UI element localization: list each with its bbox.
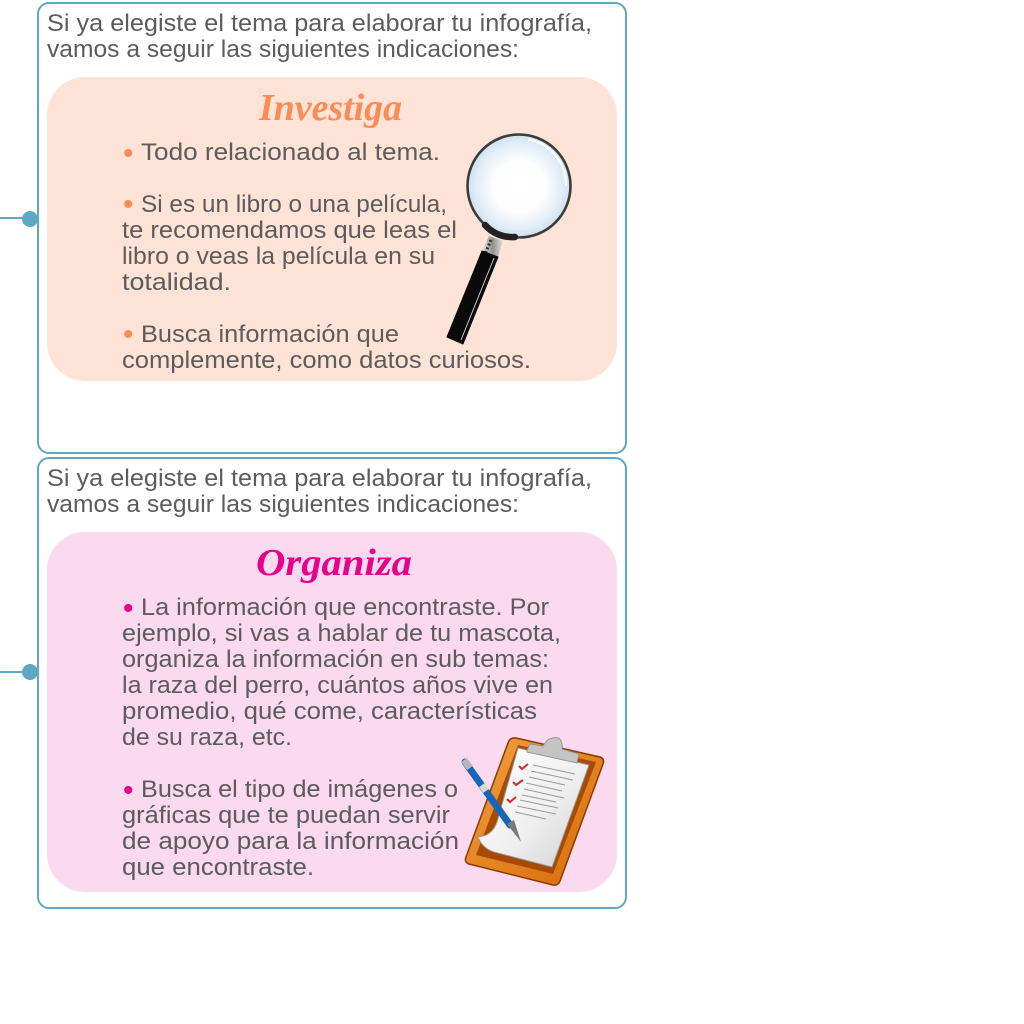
list: Investiga: libro o veas la película en su [122,243,435,270]
panel: Investiga [0,3,626,453]
intro text: vamos a seguir las siguientes indicaciones: [47,491,519,518]
list: Investiga: Todo relacionado al tema. [141,139,440,166]
list: Organiza: de su raza, etc. [122,724,292,751]
intro text: Si ya elegiste el tema para elaborar tu infografía, [47,465,592,492]
card background [47,77,617,381]
list: Organiza: • [123,592,134,625]
heading: Investiga: Investiga [258,87,402,129]
panel frame [38,458,626,908]
list: Investiga [122,137,531,374]
list: Organiza: organiza la información en sub temas: [122,646,549,673]
intro text: vamos a seguir las siguientes indicaciones: [47,36,519,63]
connector: Organiza [0,664,38,680]
list: Organiza: la raza del perro, cuántos años vive en [122,672,553,699]
card background [47,532,617,892]
list: Investiga: Busca información que [141,321,399,348]
list: Organiza: • [123,774,134,807]
icon: magnifying glass [447,134,570,344]
panel: Organiza [0,458,626,908]
list: Investiga: • [123,318,134,351]
intro text [47,10,592,63]
list: Organiza: promedio, qué come, características [122,698,537,725]
list: Organiza: que encontraste. [122,854,314,881]
connector: Investiga [0,211,38,227]
intro text: Si ya elegiste el tema para elaborar tu infografía, [47,10,592,37]
list: Organiza: Busca el tipo de imágenes o [141,776,458,803]
list: Investiga: Si es un libro o una película, [141,191,447,218]
list: Investiga: te recomendamos que leas el [122,217,457,244]
list: Investiga: • [123,188,134,221]
list: Organiza: La información que encontraste. Por [141,594,549,621]
list: Organiza: gráficas que te puedan servir [122,802,450,829]
icon: clipboard and pen [464,738,604,885]
heading: Organiza: Organiza [256,542,412,584]
list: Organiza [122,592,561,881]
list: Organiza: de apoyo para la información [122,828,459,855]
list: Investiga: totalidad. [122,269,231,296]
intro text [47,465,592,518]
list: Investiga: • [123,137,134,170]
panel frame [38,3,626,453]
list: Investiga: complemente, como datos curiosos. [122,347,531,374]
list: Organiza: ejemplo, si vas a hablar de tu mascota, [122,620,561,647]
